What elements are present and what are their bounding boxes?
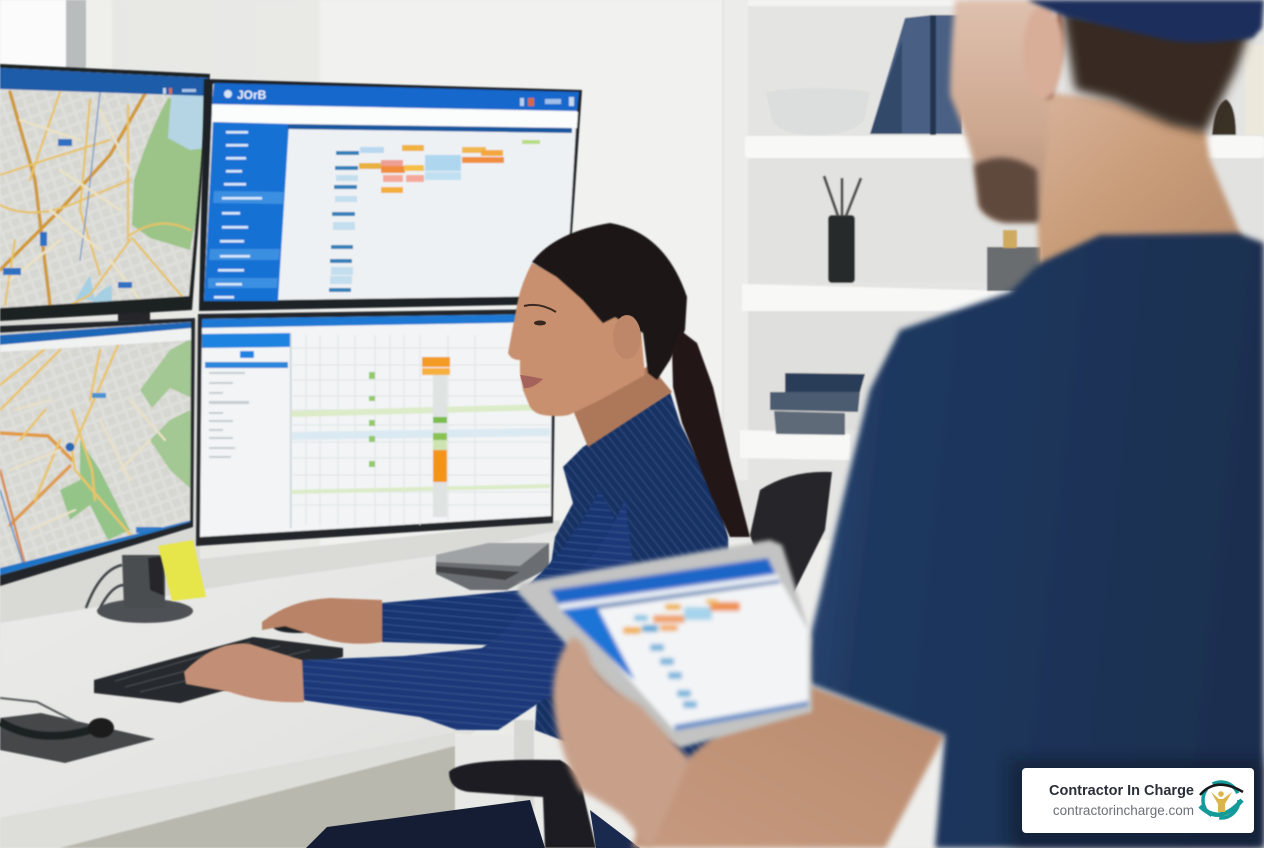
brand name: Contractor In Charge: [1049, 783, 1194, 799]
tablet sidebar: [561, 605, 635, 680]
keyboard: [94, 637, 343, 703]
tablet: [517, 540, 812, 748]
map header bar: [0, 66, 210, 96]
woman near arm: [184, 500, 640, 730]
woman operator: [184, 223, 750, 848]
woman eye: [534, 320, 546, 326]
woman trousers: [306, 800, 545, 848]
man forearm: [632, 682, 945, 848]
woman face: [508, 263, 645, 416]
man hand holding tablet: [553, 637, 690, 848]
office chair: [449, 472, 832, 848]
icon: blue binders: [870, 15, 962, 135]
map lake: [167, 94, 204, 151]
icon: dark vase with sticks: [824, 176, 861, 283]
spreadsheet side panel: [202, 333, 292, 528]
icon: stacked books: [770, 373, 865, 435]
woman neck: [573, 365, 672, 447]
spreadsheet table: [291, 335, 550, 525]
map parks: [140, 338, 192, 490]
icon: brand logo: [1200, 782, 1243, 818]
shelving unit: [722, 0, 1264, 540]
sticky note: [158, 540, 206, 601]
woman torso shirt: [535, 392, 735, 770]
map header bar: [0, 322, 192, 345]
woman hair: [532, 223, 687, 380]
man beard: [974, 158, 1038, 222]
map footer bar: [0, 520, 192, 578]
app sidebar: [204, 122, 289, 301]
app header: JOrB: [237, 88, 267, 102]
printer on desk: [436, 543, 549, 590]
brand badge: [1010, 760, 1264, 848]
tablet schedule blocks: [623, 599, 740, 708]
woman ponytail: [672, 330, 750, 537]
woman far hand: [262, 598, 382, 644]
phone headset on mat: [0, 698, 155, 763]
desk: [0, 530, 600, 848]
app header: [212, 83, 579, 111]
man shirt: [800, 233, 1264, 848]
monitor: top-right scheduling software: [199, 79, 582, 311]
tablet header: [550, 558, 776, 604]
icon: white bowl: [766, 88, 870, 135]
brand url: contractorincharge.com: [1053, 803, 1194, 818]
woman mouse: [272, 619, 322, 633]
woman brow: [524, 305, 556, 312]
map roads: [0, 345, 165, 570]
man cap: [1027, 0, 1264, 43]
monitor: bottom-right spreadsheet: [196, 309, 556, 546]
woman near hand: [184, 644, 304, 702]
man neck: [1030, 90, 1245, 275]
man hair: [1062, 10, 1250, 133]
shelf boards: [745, 136, 1264, 158]
woman ear: [613, 315, 641, 359]
woman far arm: [262, 490, 620, 645]
map roads: [0, 92, 190, 310]
monitor: bottom-left map: [0, 318, 200, 590]
man face: [950, 0, 1050, 222]
icon: grey cup: [987, 230, 1041, 291]
map park: [132, 98, 210, 250]
monitor stand and cables: [86, 308, 193, 623]
man ear: [1023, 5, 1064, 100]
woman lips: [520, 375, 543, 388]
monitor: top-left map: [0, 60, 220, 321]
man in navy shirt: [800, 0, 1264, 848]
schedule blocks: [329, 140, 540, 292]
